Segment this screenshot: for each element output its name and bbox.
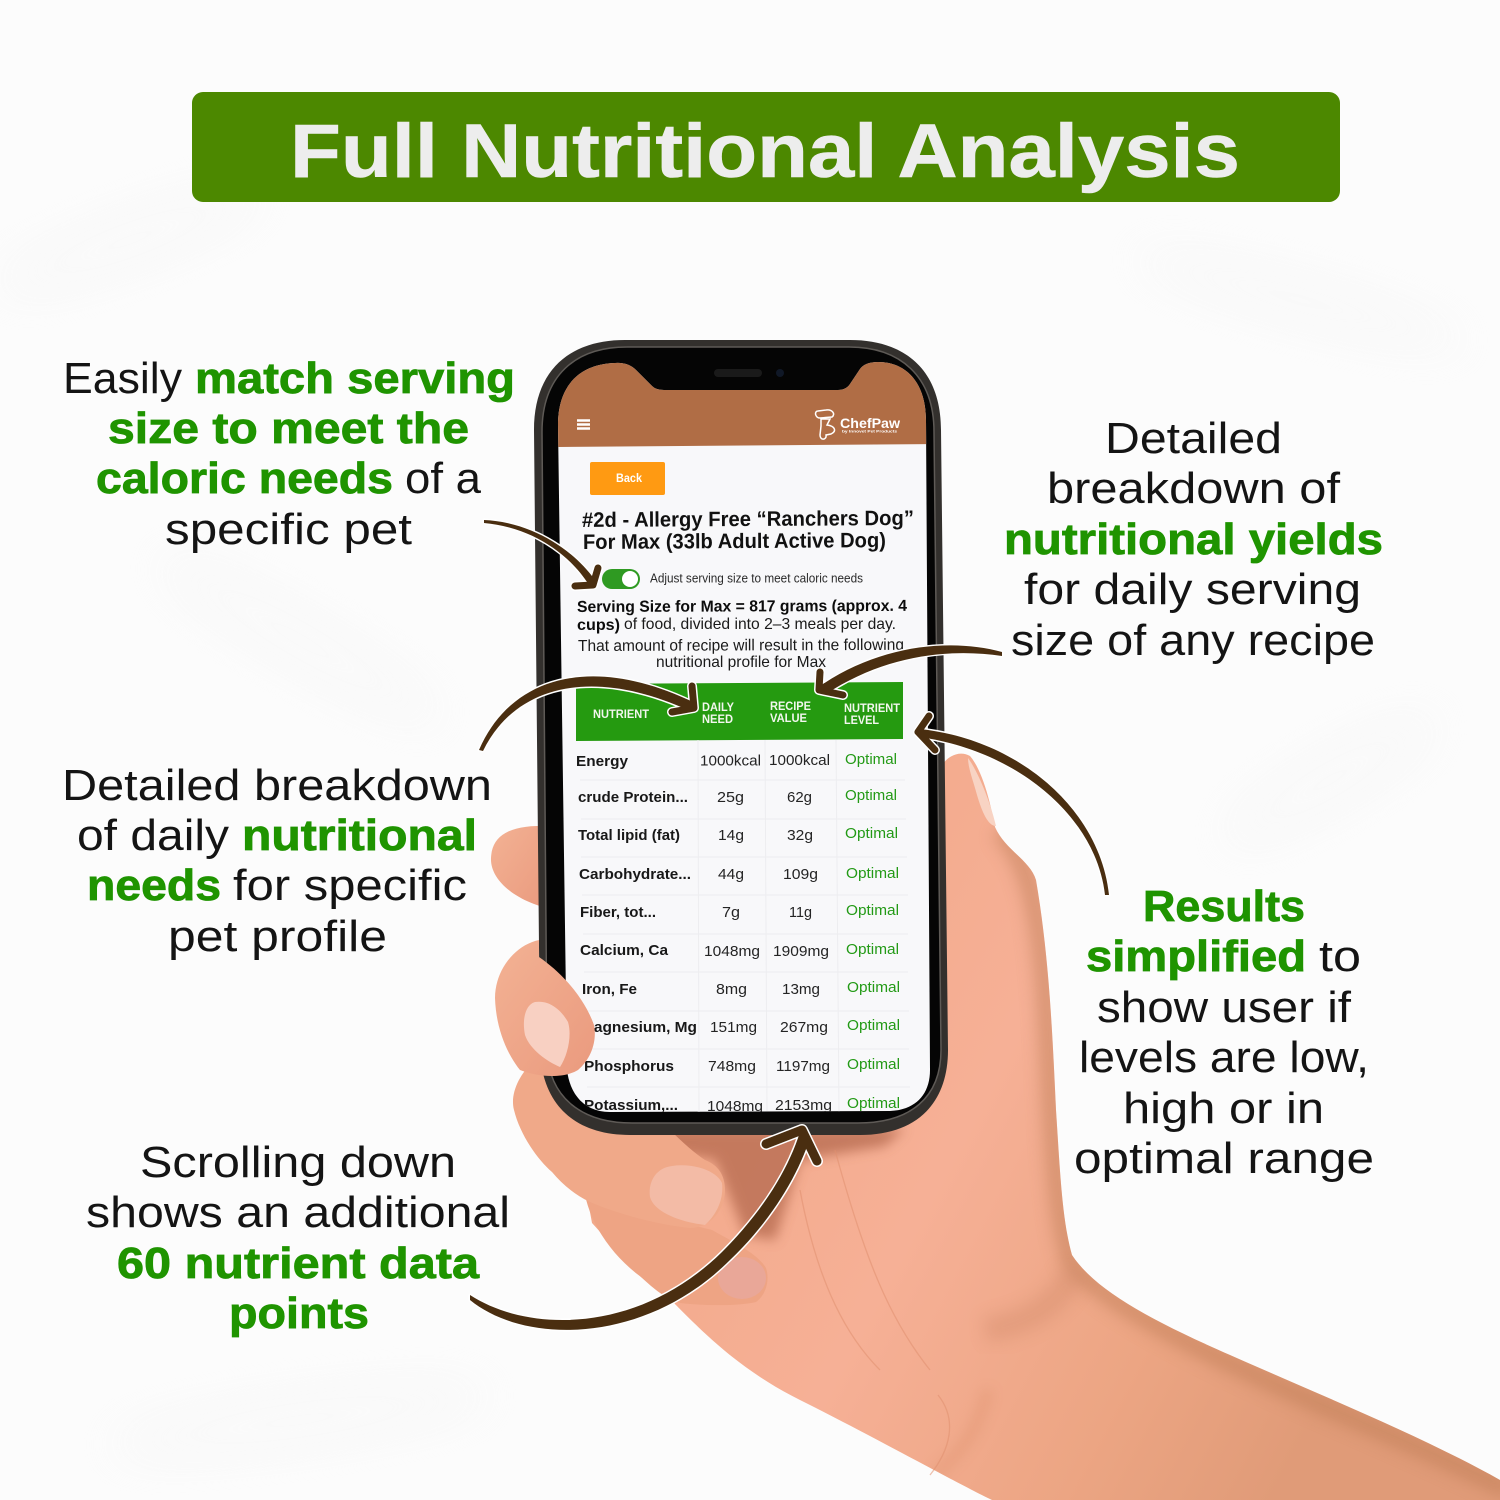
row: Total lipid: Total lipid (fat) xyxy=(578,827,680,844)
row: Carbohydrate: Carbohydrate... xyxy=(579,866,691,883)
toggle switch xyxy=(602,569,640,589)
callout: serving size: Easily xyxy=(63,354,182,403)
title banner xyxy=(192,92,1340,202)
row: Potassium: Potassium,... xyxy=(584,1097,678,1114)
serving size text: nutritional profile for Max xyxy=(656,654,826,671)
serving size text: That amount of recipe will result in the following xyxy=(578,637,904,655)
row: Total lipid xyxy=(578,827,897,843)
row: Iron: 8mg xyxy=(716,981,747,998)
phone screen xyxy=(550,355,940,1125)
row: Fiber xyxy=(581,904,898,920)
row: Carbohydrate xyxy=(580,867,898,882)
table header xyxy=(576,682,903,741)
logo: ChefPaw xyxy=(816,410,901,439)
hand: palm and arm behind phone xyxy=(560,754,1500,1500)
row: Iron: Optimal xyxy=(847,979,900,996)
row: Energy: 1000kcal xyxy=(700,752,761,770)
callout: results simplified: simplified xyxy=(1086,932,1306,981)
row: Phosphorus: Phosphorus xyxy=(584,1058,674,1075)
hand: front finger with nail xyxy=(495,940,595,1076)
table header: DAILY xyxy=(702,700,734,714)
recipe heading: For Max (33lb Adult Active Dog) xyxy=(583,529,886,554)
callout: serving size: specific pet xyxy=(165,505,412,554)
hand: index finger with nail xyxy=(513,1060,725,1228)
toggle label: Adjust serving size to meet caloric needs xyxy=(650,572,863,586)
recipe heading xyxy=(582,507,914,554)
row: crude Protein: 25g xyxy=(717,789,744,806)
row: Iron: Iron, Fe xyxy=(582,981,637,998)
row: Iron xyxy=(583,981,899,997)
serving size text: of food, divided into 2–3 meals per day. xyxy=(624,616,896,633)
callout: nutritional needs: for specific xyxy=(233,861,467,910)
callout: nutritional yields: Detailed xyxy=(1105,414,1282,463)
row: Magnesium: 267mg xyxy=(780,1019,828,1036)
row: Calcium: 1909mg xyxy=(773,943,829,960)
callout: scrolling xyxy=(86,1138,510,1338)
row: Carbohydrate: Optimal xyxy=(846,865,899,882)
row: Calcium: 1048mg xyxy=(704,943,760,960)
row: Phosphorus: Optimal xyxy=(847,1056,900,1073)
arrow: to daily need xyxy=(479,676,695,751)
callout: serving size: match serving xyxy=(195,354,515,403)
row: Fiber: Optimal xyxy=(846,902,899,919)
callout: results simplified: Results xyxy=(1143,882,1305,931)
row: Potassium xyxy=(585,1097,899,1112)
callout: scrolling: shows an additional xyxy=(86,1188,510,1237)
callout: serving size: of a xyxy=(405,454,482,503)
table header: RECIPE xyxy=(770,699,811,713)
callout: nutritional yields xyxy=(1004,414,1383,665)
callout: scrolling: 60 nutrient data xyxy=(117,1239,480,1288)
title banner: Full Nutritional Analysis xyxy=(290,109,1240,194)
arrow: to nutrient level xyxy=(918,716,1109,895)
row: Calcium: Calcium, Ca xyxy=(580,942,669,959)
callout: nutritional needs xyxy=(62,761,492,961)
table rows xyxy=(576,740,910,1115)
serving size text xyxy=(577,598,907,671)
hand: upper left finger behind phone xyxy=(491,826,547,908)
row: Phosphorus: 748mg xyxy=(708,1058,756,1075)
row: Magnesium: Magnesium, Mg xyxy=(581,1019,697,1036)
callout: results simplified: high or in xyxy=(1123,1084,1324,1133)
callout: nutritional needs: needs xyxy=(87,861,221,910)
callout: serving size: caloric needs xyxy=(96,454,393,503)
row: Carbohydrate: 44g xyxy=(718,866,744,883)
table header: LEVEL xyxy=(844,713,879,727)
back button xyxy=(590,462,665,495)
arrow: to toggle xyxy=(484,520,598,586)
callout: results simplified: to xyxy=(1319,932,1361,981)
callout: nutritional needs: nutritional xyxy=(242,811,477,860)
callout: results simplified: optimal range xyxy=(1074,1134,1374,1183)
phone body xyxy=(534,340,948,1135)
table header: NUTRIENT xyxy=(593,707,650,721)
row: Total lipid: 14g xyxy=(718,827,744,844)
row: Phosphorus xyxy=(585,1058,899,1074)
back button: Back xyxy=(616,471,642,485)
callout: scrolling: Scrolling down xyxy=(140,1138,456,1187)
icon: menu xyxy=(577,420,590,428)
row: crude Protein: crude Protein... xyxy=(578,789,688,806)
callout: serving size: size to meet the xyxy=(108,404,469,453)
callout: serving size xyxy=(63,354,515,554)
row: Energy: 1000kcal xyxy=(769,752,830,769)
row: crude Protein: Optimal xyxy=(845,787,897,804)
table header: NUTRIENT xyxy=(844,701,901,715)
callout: nutritional needs: pet profile xyxy=(168,912,387,961)
row: Total lipid: Optimal xyxy=(845,825,898,842)
recipe heading: #2d - Allergy Free “Ranchers Dog” xyxy=(582,507,914,532)
row: Calcium: Optimal xyxy=(846,941,899,958)
logo: ChefPaw: ChefPaw xyxy=(840,416,901,431)
hand: thumb nail on right finger xyxy=(968,758,996,826)
row: Iron: 13mg xyxy=(782,981,820,998)
arrow: scrolling up xyxy=(470,1130,817,1330)
callout: results simplified: levels are low, xyxy=(1079,1033,1369,1082)
row: Potassium: Optimal xyxy=(847,1095,900,1112)
row: Phosphorus: 1197mg xyxy=(776,1058,830,1075)
table header: VALUE xyxy=(770,711,807,725)
row: Energy: Energy xyxy=(576,753,629,770)
serving size text: cups) xyxy=(577,617,620,634)
row: Fiber: Fiber, tot... xyxy=(580,904,656,921)
row: Magnesium: Optimal xyxy=(847,1017,900,1034)
row: crude Protein: 62g xyxy=(787,789,812,806)
callout: nutritional yields: for daily serving xyxy=(1024,565,1361,614)
phone xyxy=(534,340,948,1135)
callout: results simplified xyxy=(1074,882,1374,1183)
logo: ChefPaw: by Innovet Pet Products xyxy=(842,430,897,434)
row: Fiber: 7g xyxy=(722,904,740,921)
serving size text: Serving Size for Max = 817 grams (approx. 4 xyxy=(577,598,907,616)
row: Calcium xyxy=(580,943,898,959)
row: Potassium: 1048mg xyxy=(707,1098,763,1115)
row: Magnesium xyxy=(592,1019,899,1035)
row: Energy xyxy=(577,753,896,769)
speaker and camera xyxy=(714,369,784,377)
callout: nutritional yields: size of any recipe xyxy=(1011,616,1375,665)
row: Fiber: 11g xyxy=(789,904,812,921)
callout: nutritional needs: Detailed breakdown xyxy=(62,761,492,810)
row: Energy: Optimal xyxy=(845,751,897,768)
callout: nutritional yields: breakdown of xyxy=(1047,464,1341,513)
hand: middle finger with nail xyxy=(585,1195,768,1305)
row: Magnesium: 151mg xyxy=(710,1019,757,1036)
table header: NEED xyxy=(702,712,733,726)
row: crude Protein xyxy=(578,789,896,805)
row: Potassium: 2153mg xyxy=(775,1097,832,1114)
row: Total lipid: 32g xyxy=(787,827,813,844)
row: Carbohydrate: 109g xyxy=(783,866,818,883)
arrow: to recipe value xyxy=(819,645,1002,695)
callout: results simplified: show user if xyxy=(1097,983,1352,1032)
callout: nutritional yields: nutritional yields xyxy=(1004,515,1383,564)
callout: scrolling: points xyxy=(229,1289,369,1338)
callout: nutritional needs: of daily xyxy=(77,811,229,860)
app header xyxy=(558,362,926,447)
